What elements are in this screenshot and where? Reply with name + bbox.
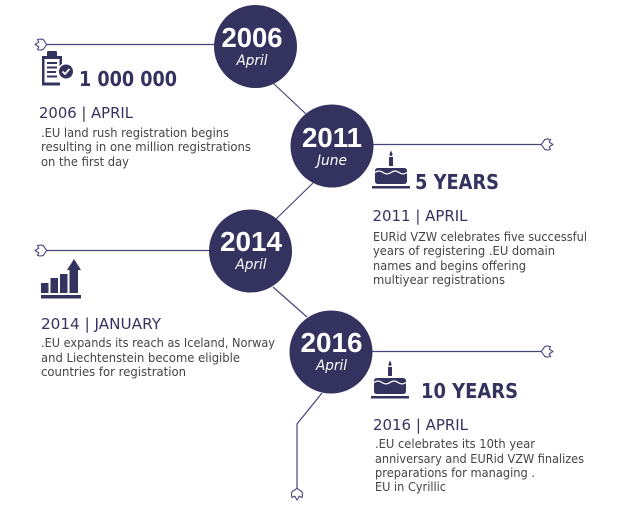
description: 2006: on the first day [41, 154, 130, 169]
year circle: 2011 June: 2011 [302, 122, 362, 153]
description: 2006: resulting in one million registrations [41, 139, 251, 154]
year circle: 2014 April [209, 210, 292, 292]
description: 2016: .EU celebrates its 10th year [375, 436, 536, 451]
branch line with arrow: 2014 left [35, 245, 210, 256]
icon: birthday cake [371, 360, 409, 398]
icon: clipboard with check [42, 51, 74, 86]
subheading: 2014 | January: 2014 | JANUARY [41, 315, 162, 333]
subheading: 2016 | April: 2016 | APRIL [373, 416, 469, 434]
icon: rising bar chart [41, 259, 81, 298]
stat: 1 000 000: 1 000 000 [79, 67, 177, 91]
description: 2016: anniversary and EURid VZW finalizes [375, 451, 584, 466]
connector: 2016 downward [297, 393, 322, 488]
description: 2016: preparations for managing . [375, 465, 535, 480]
description: 2011: EURid VZW celebrates five successful [373, 229, 587, 244]
branch line with arrow: 2016 right [372, 346, 553, 357]
connector: 2011 to 2014 [275, 183, 313, 220]
description: 2016: EU in Cyrillic [375, 479, 446, 494]
year circle: 2011 June: June [314, 153, 347, 169]
stat: 5 years: 5 YEARS [415, 170, 499, 194]
description: 2011: years of registering .EU domain [373, 243, 555, 258]
panel: 2014 milestone [41, 259, 276, 379]
year circle: 2006 April: April [236, 53, 268, 69]
subheading: 2011 | April: 2011 | APRIL [372, 207, 468, 225]
description: 2014: and Liechtenstein become eligible [41, 350, 240, 365]
branch line with arrow: 2006 left [35, 39, 215, 50]
stat: 10 years: 10 YEARS [421, 379, 518, 403]
description: 2014: countries for registration [41, 364, 186, 379]
year circle: 2011 June [290, 104, 374, 188]
description: 2011: multiyear registrations [373, 272, 505, 287]
panel: 2016 milestone [371, 360, 584, 494]
year circle: 2016 April [290, 310, 372, 394]
subheading: 2006 | April: 2006 | APRIL [39, 104, 134, 122]
year circle: 2014 April: 2014 [220, 226, 283, 257]
connector: 2006 to 2011 [273, 83, 306, 114]
panel: 2011 milestone [372, 150, 587, 287]
year circle: 2006 April [214, 5, 297, 88]
year circle: 2006 April: 2006 [222, 22, 282, 53]
description: 2011: names and begins offering [373, 258, 526, 273]
panel: 2006 milestone [39, 51, 251, 169]
icon: birthday cake [372, 150, 410, 188]
description: 2006: .EU land rush registration begins [41, 125, 229, 140]
year circle: 2016 April: April [315, 358, 347, 374]
year circle: 2016 April: 2016 [300, 327, 362, 358]
description: 2014: .EU expands its reach as Iceland, Norway [41, 335, 276, 350]
connector: 2014 to 2016 [273, 287, 307, 317]
branch line with arrow: 2011 right [373, 139, 553, 150]
year circle: 2014 April: April [235, 257, 267, 273]
down arrow: 2016 branch end [292, 488, 302, 500]
